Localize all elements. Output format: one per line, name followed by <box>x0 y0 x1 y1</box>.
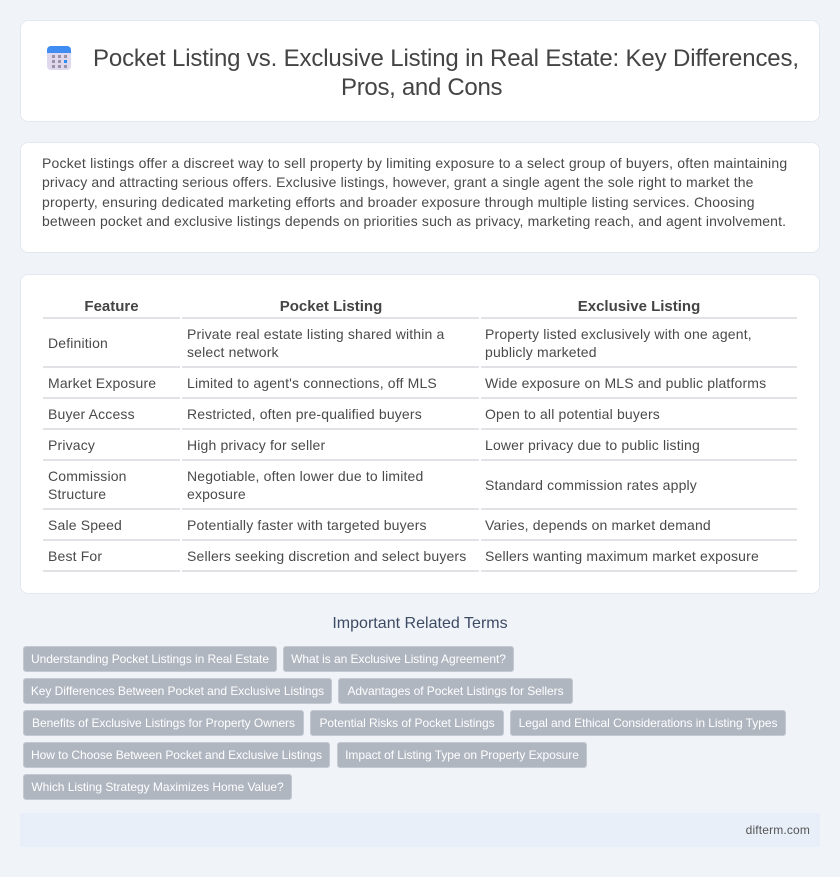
row: best for: Sellers wanting maximum market exposure <box>485 548 759 564</box>
row: sale speed <box>48 517 711 533</box>
table header: feature: Feature <box>84 298 139 315</box>
panel: header <box>20 20 820 122</box>
row: definition <box>48 326 752 360</box>
tags: related terms: Key Differences Between Pocket and Exclusive Listings <box>31 684 324 698</box>
row: privacy: Lower privacy due to public listing <box>485 437 700 453</box>
title: Pocket Listing vs. Exclusive Listing in Real Estate: Key Differences, <box>93 45 799 72</box>
row: privacy: High privacy for seller <box>187 437 325 453</box>
panel: intro text <box>20 142 820 253</box>
intro paragraph <box>42 155 787 229</box>
row: commission structure: Structure <box>48 486 106 502</box>
row: sale speed: Sale Speed <box>48 517 122 533</box>
title: Pros, and Cons <box>341 74 502 101</box>
tags: related terms: How to Choose Between Pocket and Exclusive Listings <box>31 748 322 762</box>
row: market exposure: Market Exposure <box>48 375 156 391</box>
row: commission structure: Negotiable, often lower due to limited <box>187 468 423 484</box>
tags: related terms: What is an Exclusive Listing Agreement? <box>291 652 506 666</box>
intro paragraph: between pocket and exclusive listings depends on priorities such as privacy, marketing reach, and agent involvement. <box>42 213 786 229</box>
tags: related terms: Benefits of Exclusive Listings for Property Owners <box>32 716 295 730</box>
row: commission structure: Commission <box>48 468 127 484</box>
panel: comparison table <box>20 274 820 594</box>
row: sale speed: Varies, depends on market demand <box>485 517 711 533</box>
intro paragraph: Pocket listings offer a discreet way to sell property by limiting exposure to a select group of buyers, often maintaining <box>42 155 787 171</box>
tags: related terms: Potential Risks of Pocket Listings <box>319 716 495 730</box>
row: sale speed: Potentially faster with targeted buyers <box>187 517 427 533</box>
row: definition: publicly marketed <box>485 344 597 360</box>
table header: pocket listing: Pocket Listing <box>280 298 382 315</box>
row: buyer access: Restricted, often pre-qualified buyers <box>187 406 422 422</box>
row: best for: Sellers seeking discretion and select buyers <box>187 548 466 564</box>
row: best for <box>48 548 759 564</box>
tags: related terms: Which Listing Strategy Maximizes Home Value? <box>31 780 284 794</box>
row: market exposure <box>48 375 766 391</box>
footer: site name: difterm.com <box>746 823 810 837</box>
row: market exposure: Wide exposure on MLS and public platforms <box>485 375 766 391</box>
tags: related terms: Impact of Listing Type on Property Exposure <box>345 748 579 762</box>
footer bar <box>20 813 820 847</box>
row: buyer access: Buyer Access <box>48 406 135 422</box>
tags: related terms: Legal and Ethical Considerations in Listing Types <box>519 716 777 730</box>
icon: calendar <box>47 46 71 70</box>
tags: related terms <box>23 646 786 800</box>
row: commission structure: exposure <box>187 486 246 502</box>
row: definition: Definition <box>48 335 108 351</box>
row: market exposure: Limited to agent's connections, off MLS <box>187 375 437 391</box>
tags: related terms: Understanding Pocket Listings in Real Estate <box>31 652 269 666</box>
intro paragraph: privacy and attracting serious offers. Exclusive listings, however, grant a single agent the sole right to market the <box>42 174 754 190</box>
row: commission structure: Standard commission rates apply <box>485 477 697 493</box>
heading: important related terms: Important Related Terms <box>332 615 508 632</box>
row: buyer access: Open to all potential buyers <box>485 406 660 422</box>
title <box>93 45 799 101</box>
table header: exclusive listing: Exclusive Listing <box>578 298 700 315</box>
row: definition: select network <box>187 344 279 360</box>
row: best for: Best For <box>48 548 102 564</box>
row: commission structure <box>48 468 697 502</box>
tags: related terms: Advantages of Pocket Listings for Sellers <box>347 684 564 698</box>
row: privacy <box>48 437 700 453</box>
row: definition: Private real estate listing shared within a <box>187 326 444 342</box>
intro paragraph: property, ensuring dedicated marketing efforts and broader exposure through multiple listing services. Choosing <box>42 194 755 210</box>
row: buyer access <box>48 406 660 422</box>
row: privacy: Privacy <box>48 437 95 453</box>
row: definition: Property listed exclusively with one agent, <box>485 326 752 342</box>
